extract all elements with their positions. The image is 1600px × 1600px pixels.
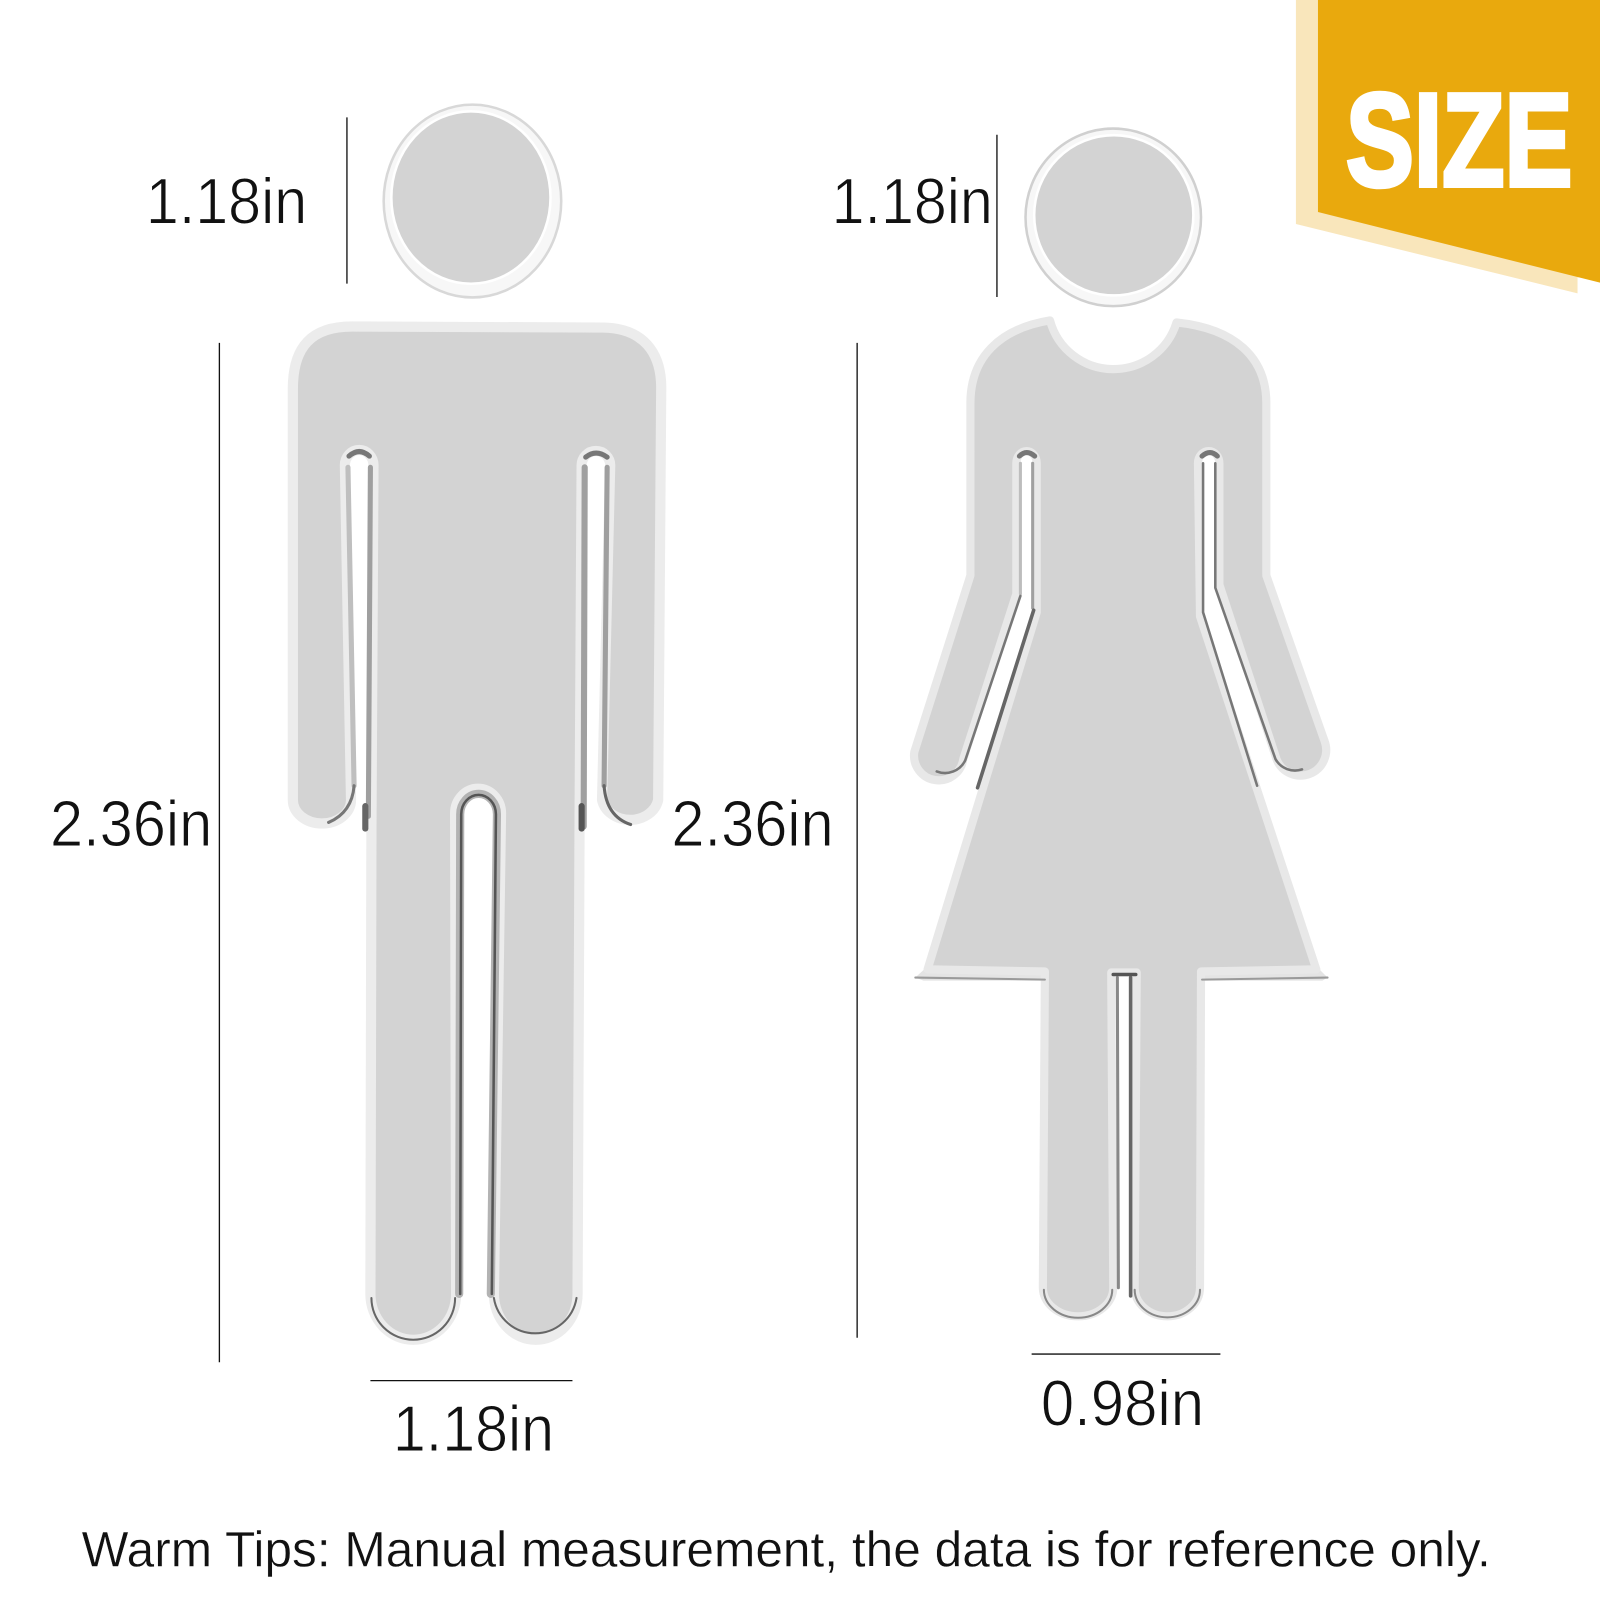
warm tips note: Warm Tips: Manual measurement, the data is for reference only.: [82, 1521, 1491, 1577]
corner badge: SIZE: [1296, 0, 1600, 293]
woman skirt hem bevels: [915, 966, 1328, 981]
woman body: [914, 320, 1326, 1316]
label: man height: 2.36in: [50, 787, 212, 860]
man chrome details: [329, 452, 631, 1340]
label: man head diameter: 1.18in: [146, 164, 307, 237]
man body: [293, 327, 661, 1340]
label: man width: 1.18in: [393, 1392, 554, 1465]
dimension lines: [219, 117, 1220, 1381]
woman figure: [914, 129, 1328, 1318]
label: woman width: 0.98in: [1041, 1367, 1204, 1440]
woman chrome details: [915, 453, 1328, 1318]
label: woman head diameter: 1.18in: [832, 164, 993, 237]
man head: [384, 105, 561, 297]
woman head: [1026, 129, 1201, 306]
man figure: [293, 105, 661, 1340]
label: woman height: 2.36in: [671, 787, 834, 860]
